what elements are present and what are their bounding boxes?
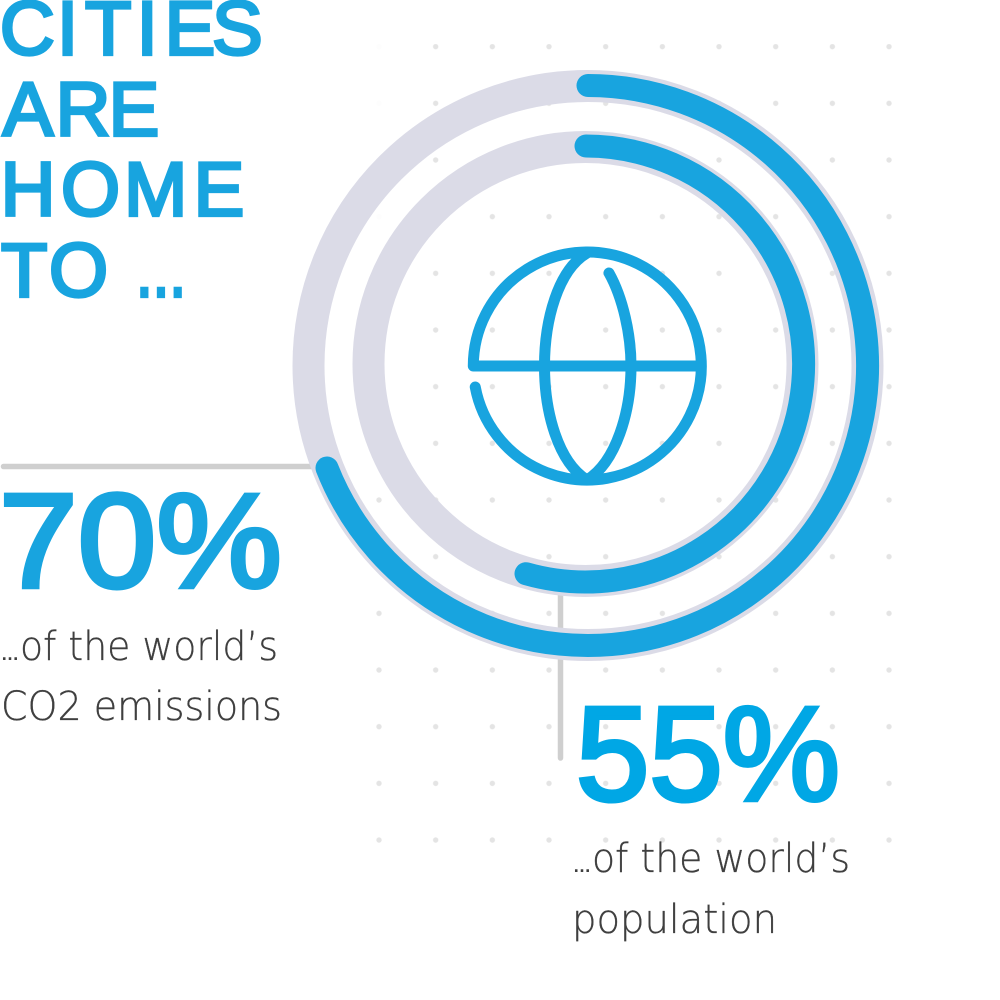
chart: inner ring 55% [368, 146, 804, 582]
text: of the world's CO2 emissions: of the world’s [20, 624, 278, 670]
title: ... [136, 228, 186, 314]
text: of the world's population: population [572, 897, 777, 943]
text: of the world's population: of the world’s [592, 836, 850, 882]
connector line: 55% [558, 590, 563, 758]
text: of the world's CO2 emissions [1, 624, 282, 730]
text: of the world's CO2 emissions: … [1, 644, 19, 664]
stat: 70%: 70% [0, 467, 282, 616]
text: of the world's CO2 emissions: CO2 emissions [1, 684, 282, 730]
title: HOME [1, 148, 244, 232]
stat: 55%: 55% [576, 680, 840, 829]
icon: globe [473, 252, 701, 480]
title: TO [1, 228, 108, 314]
connector line: 70% [4, 464, 314, 469]
chart: outer ring 70% [308, 86, 868, 645]
title: ARE [3, 68, 159, 152]
title [0, 0, 263, 314]
text: of the world's population [572, 836, 850, 943]
text: of the world's population: … [573, 856, 591, 876]
